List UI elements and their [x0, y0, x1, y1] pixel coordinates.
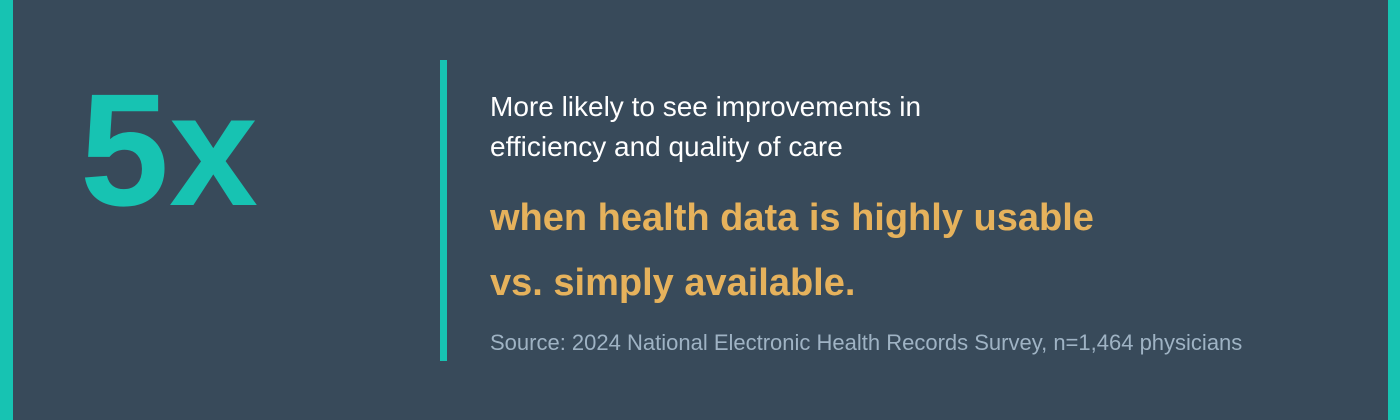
big stat: 5x: 5x [80, 60, 258, 239]
highlighted statement [489, 197, 1094, 304]
right accent bar [1388, 0, 1400, 420]
highlighted statement: when health data is highly usable [489, 197, 1094, 239]
source note: Source: 2024 National Electronic Health Records Survey, n=1,464 physicians [490, 330, 1242, 355]
description text: More likely to see improvements in [490, 91, 921, 122]
vertical divider [440, 60, 447, 361]
highlighted statement: vs. simply available. [490, 262, 855, 304]
description text: efficiency and quality of care [490, 131, 843, 162]
description text [490, 91, 921, 162]
left accent bar [0, 0, 13, 420]
